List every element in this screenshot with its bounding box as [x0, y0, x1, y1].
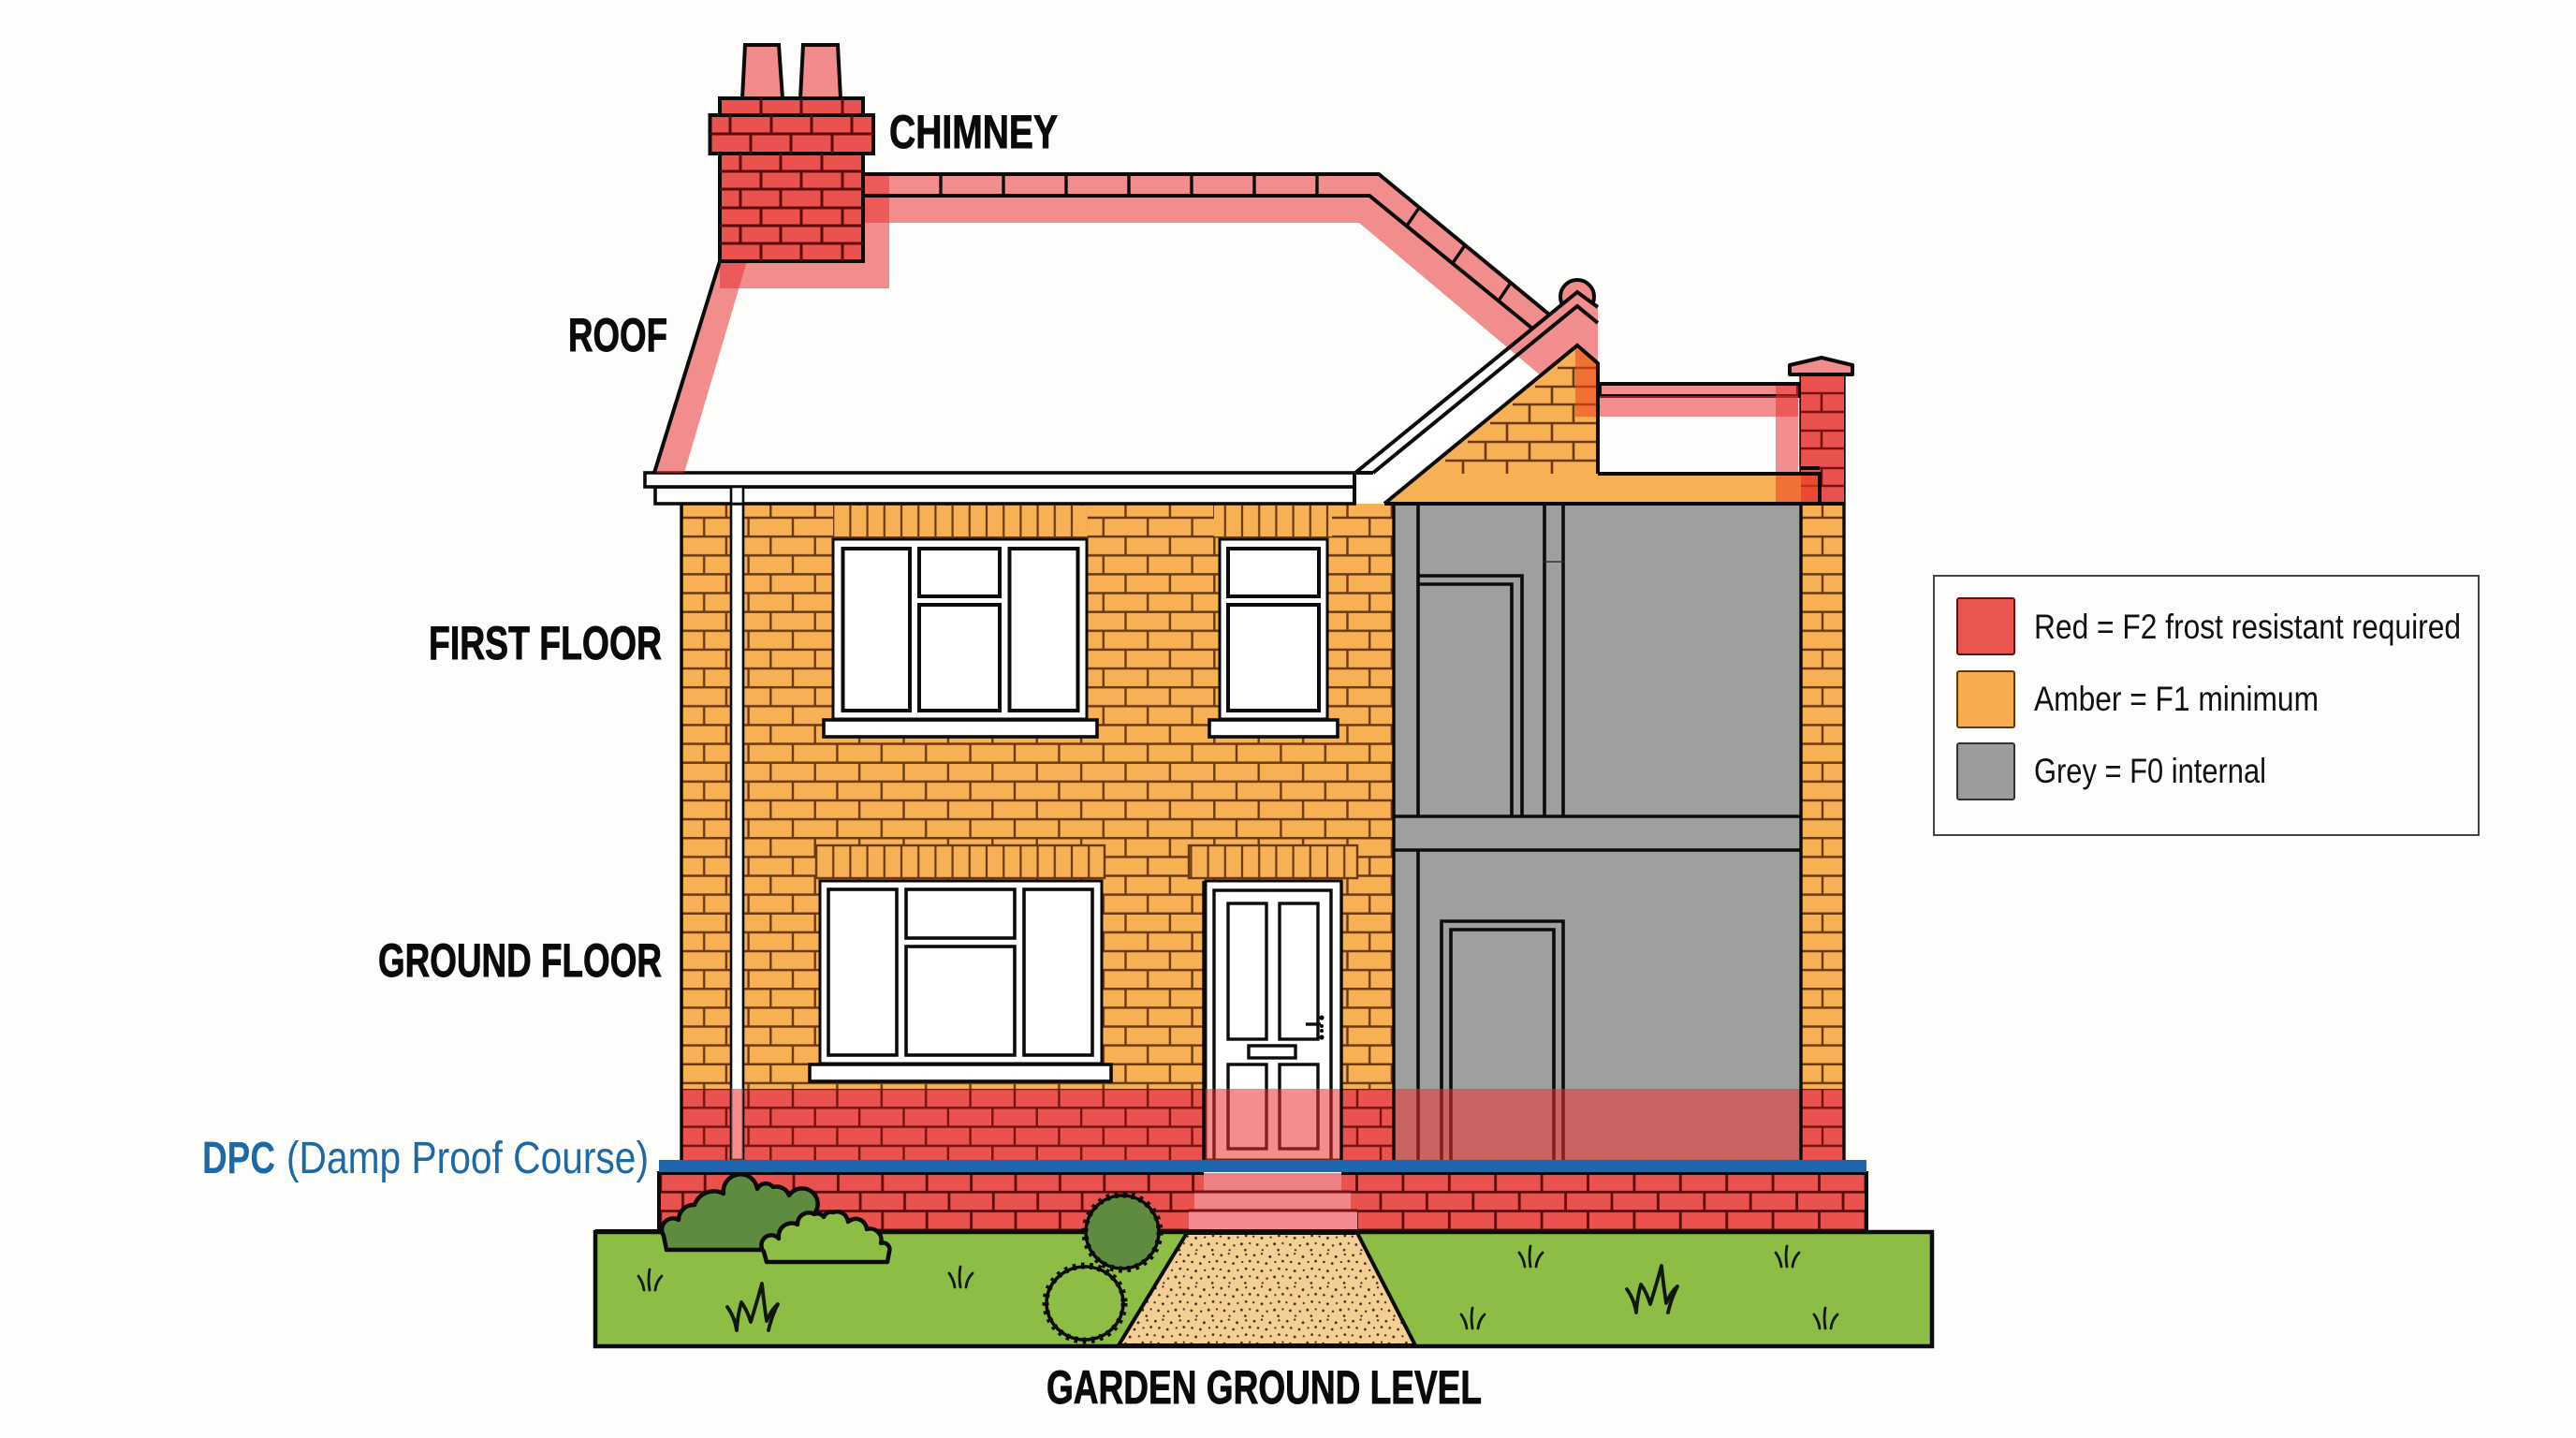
red zone overlay on left roof slope — [654, 261, 747, 473]
house illustration — [595, 45, 1932, 1346]
front wall red brick below DPC zone — [681, 1089, 1204, 1160]
orange overlap on gable brick — [1575, 347, 1598, 417]
label: DPC: (Damp Proof Course) — [286, 1134, 649, 1183]
front door — [1206, 881, 1341, 1160]
red zone overlay on roof ridge and slope — [863, 174, 1598, 376]
gable finial — [1560, 280, 1594, 314]
fascia board — [645, 473, 1354, 504]
legend item: red — [1957, 598, 2461, 654]
ground floor window — [810, 881, 1111, 1081]
plinth outline — [595, 1173, 1866, 1231]
grass tufts — [638, 1246, 1837, 1330]
light round shrub — [1046, 1266, 1124, 1341]
red overlay over door, pipe and interior at low level — [731, 1089, 1801, 1160]
red zone overlay beside chimney — [863, 174, 889, 288]
main front wall amber brick — [681, 504, 1393, 1089]
white bargeboard — [1354, 292, 1598, 504]
orange overlap at eaves — [1776, 475, 1820, 504]
gravel path — [1119, 1233, 1415, 1345]
label: garden ground level: GARDEN GROUND LEVEL — [1046, 1361, 1482, 1414]
first floor soldier course over window 2 — [1214, 506, 1332, 536]
legend item: red: Red = F2 frost resistant required — [2034, 608, 2461, 646]
wall red brick right of door — [1341, 1089, 1393, 1160]
chimney stack — [710, 98, 873, 261]
legend panel — [1934, 576, 2479, 835]
roof line work — [654, 174, 1844, 504]
plinth brickwork left — [659, 1173, 1204, 1231]
legend item: amber — [1957, 671, 2319, 727]
label: chimney: CHIMNEY — [889, 106, 1058, 158]
plinth brickwork right — [1341, 1173, 1866, 1231]
chimney pots — [742, 45, 841, 98]
label: DPC: DPC — [202, 1134, 275, 1183]
right pier red brick — [1801, 376, 1844, 505]
pier cap — [1790, 358, 1852, 374]
right side wall amber brick — [1801, 505, 1844, 1089]
wall outlines — [681, 376, 1844, 1160]
red zone overlay under coping — [1598, 396, 1798, 417]
label: first floor: FIRST FLOOR — [429, 617, 662, 669]
red zone overlay at parapet end — [1776, 386, 1798, 474]
red zone overlay under chimney — [720, 261, 863, 288]
amber eaves base band — [1384, 474, 1820, 504]
dark round shrub — [1085, 1195, 1160, 1269]
legend item: amber: Amber = F1 minimum — [2034, 680, 2319, 718]
dark scalloped bush — [662, 1174, 824, 1250]
downpipe top — [731, 487, 743, 504]
first floor soldier course over window 1 — [833, 506, 1088, 536]
label: roof: ROOF — [568, 309, 667, 361]
label: ground floor: GROUND FLOOR — [378, 934, 662, 987]
side wall red brick — [1801, 1089, 1844, 1160]
parapet coping — [1600, 384, 1798, 396]
legend item: grey — [1957, 743, 2266, 800]
first floor window left — [824, 539, 1097, 737]
DPC blue band — [659, 1160, 1866, 1172]
gable brick infill — [1421, 345, 1598, 474]
ground floor soldier course over door — [1189, 845, 1357, 878]
internal cross-section in grey — [1394, 505, 1801, 1160]
entrance steps — [1189, 1173, 1357, 1231]
ground: garden lawn — [595, 1232, 1932, 1346]
downpipe — [731, 487, 743, 1160]
legend item: grey: Grey = F0 internal — [2034, 752, 2266, 790]
ground floor soldier course over window — [816, 845, 1105, 878]
first floor window right — [1209, 539, 1338, 737]
light scalloped bush — [761, 1211, 889, 1262]
